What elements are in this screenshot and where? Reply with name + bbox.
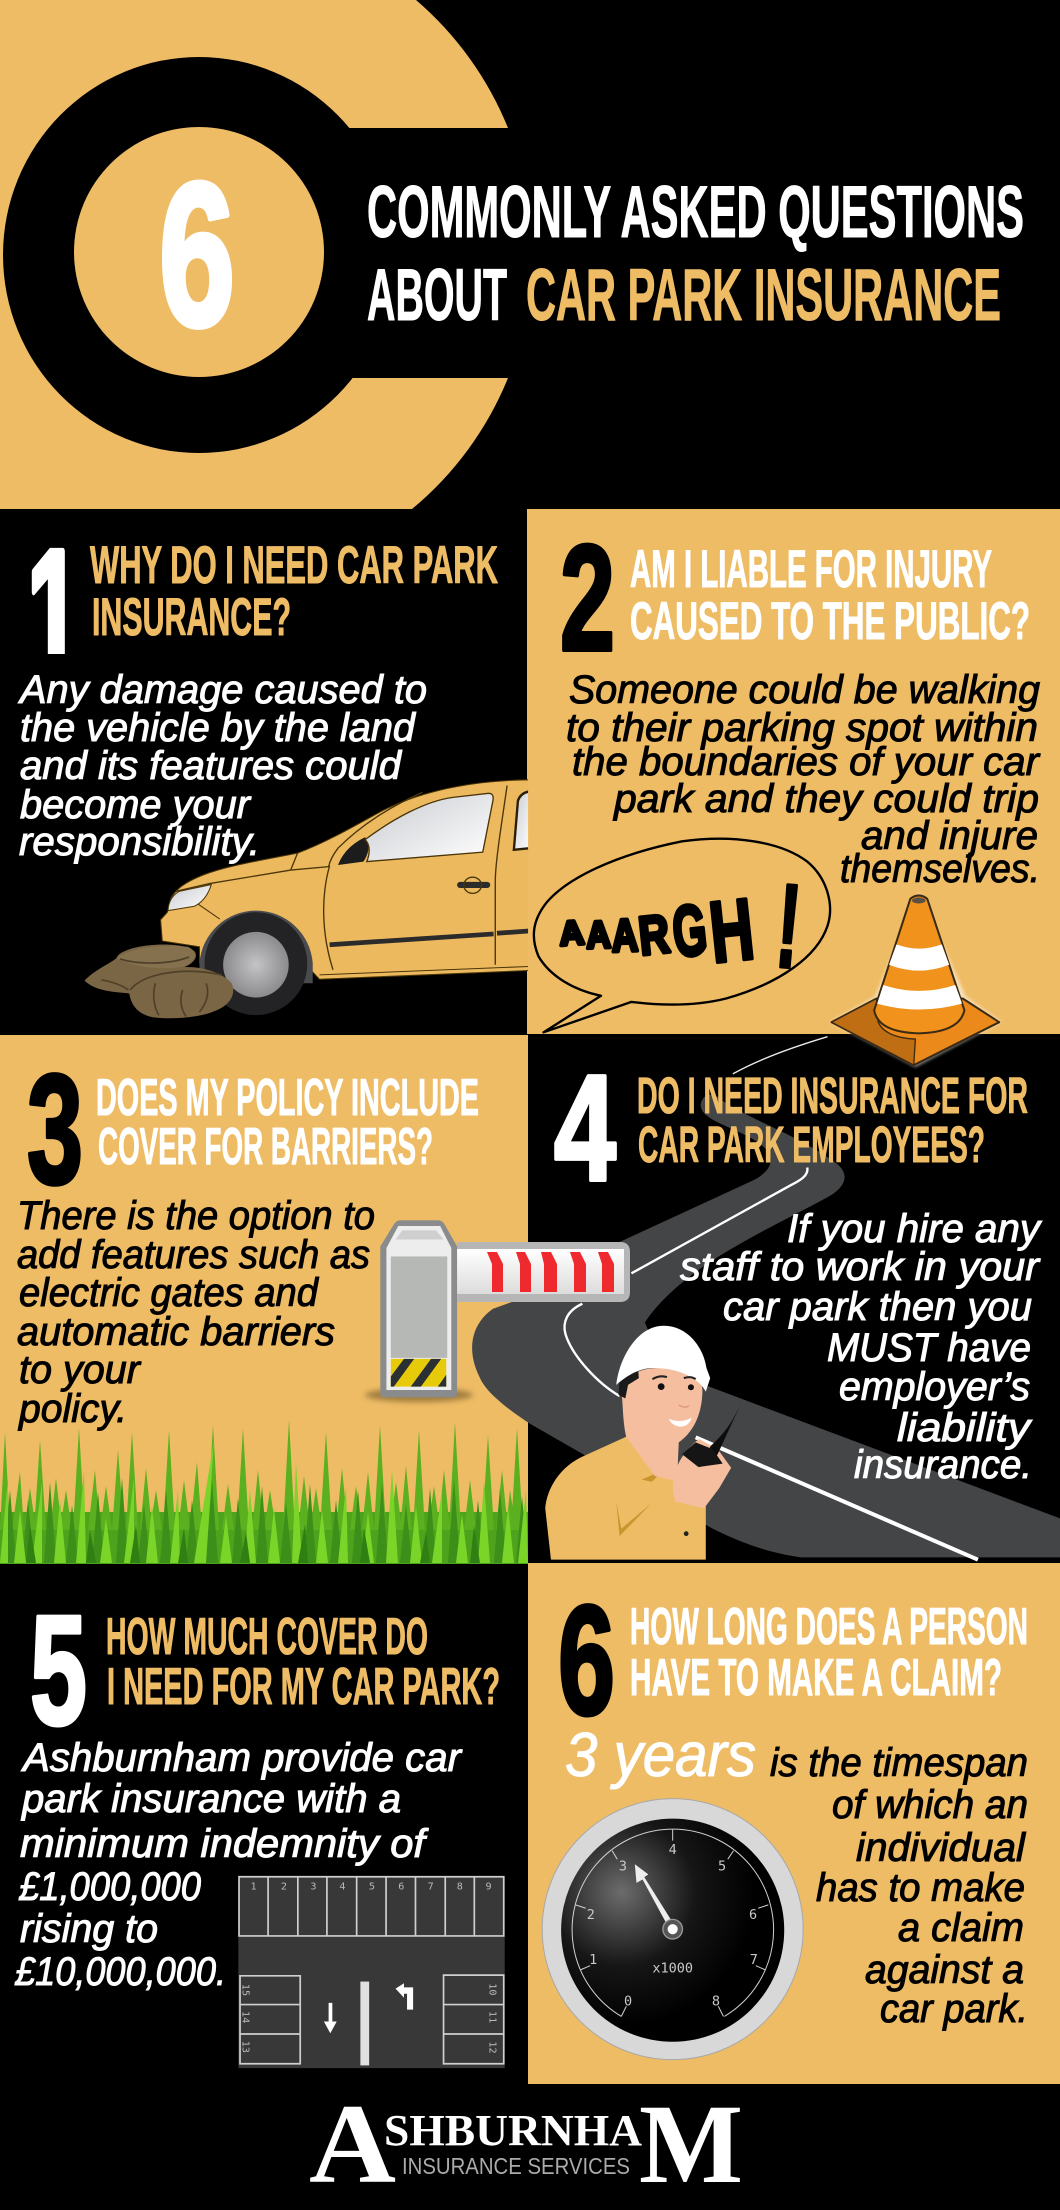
bay numbers: 1 (250, 1882, 257, 1893)
body text 6: individual (856, 1826, 1026, 1870)
barrier arm (457, 1242, 630, 1302)
body text 1 (18, 668, 427, 864)
illustration: car and rocks (85, 780, 531, 1018)
body text 2: park and they could trip (613, 777, 1039, 821)
bay numbers: 3 (310, 1882, 316, 1893)
gauge numbers: 3 (619, 1858, 627, 1874)
centre line (360, 1982, 369, 2065)
body text 2: Someone could be walking (569, 668, 1040, 712)
number 5: 5 (30, 1584, 87, 1758)
number 2: 2 (560, 513, 615, 682)
body text 6 (565, 1721, 1028, 2031)
icon: large C emblem (0, 0, 511, 509)
body text 4: insurance. (854, 1443, 1032, 1487)
windscreen strip (176, 792, 423, 891)
body text 4: staff to work in your (680, 1245, 1041, 1289)
header number 6: 6 (159, 141, 235, 369)
gauge numbers: x1000 (652, 1960, 693, 1976)
speech text AAARGH!: A (611, 910, 639, 962)
speech text AAARGH!: R (636, 904, 672, 967)
body text 3: automatic barriers (17, 1310, 335, 1354)
speech text AAARGH!: H (705, 881, 758, 981)
heading 1: INSURANCE? (92, 588, 291, 647)
body text 6: has to make (816, 1866, 1025, 1910)
gauge numbers (587, 1842, 758, 2010)
body text 1: responsibility. (19, 820, 260, 864)
heading 3: COVER FOR BARRIERS? (98, 1118, 433, 1176)
gauge needle (635, 1864, 675, 1931)
footer logo: A (309, 2082, 396, 2207)
heading 5: I NEED FOR MY CAR PARK? (107, 1658, 500, 1716)
body text 2 (566, 668, 1041, 891)
bay numbers: 4 (339, 1882, 346, 1893)
shirt (545, 1437, 706, 1560)
illustration: traffic cone (830, 892, 1002, 1067)
illustration: barrier (365, 1220, 630, 1402)
body text 4: employer’s (839, 1365, 1030, 1409)
gauge numbers: 4 (669, 1842, 677, 1858)
body text 4: car park then you (723, 1285, 1032, 1329)
body text 6: against a (865, 1948, 1024, 1992)
speech text AAARGH!: A (586, 914, 611, 957)
body text 5: rising to (20, 1907, 158, 1951)
bay numbers: 11 (487, 2011, 498, 2023)
bay numbers: 7 (428, 1882, 434, 1893)
panel 6: how long to claim (542, 1574, 1028, 2060)
gauge numbers: 2 (587, 1907, 595, 1923)
heading 3 (96, 1069, 479, 1176)
gauge numbers: 5 (718, 1858, 726, 1874)
wheel arch and wheel (199, 911, 313, 983)
number 4: 4 (554, 1043, 616, 1212)
body text 5: £1,000,000 (18, 1865, 201, 1909)
speech text AAARGH!: ! (772, 860, 805, 994)
panel 1: why car park insurance (15, 511, 531, 1018)
bay numbers: 6 (398, 1882, 404, 1893)
rocks (85, 945, 233, 1018)
bay numbers: 15 (240, 1984, 251, 1996)
number 6: 6 (558, 1574, 615, 1748)
number 1 (15, 511, 85, 717)
body text 5: minimum indemnity of (20, 1822, 429, 1866)
body text 4 (680, 1207, 1042, 1487)
bay numbers: 2 (281, 1882, 287, 1893)
car body (161, 780, 531, 979)
heading 2 (630, 540, 1030, 651)
number 3: 3 (27, 1043, 83, 1217)
bay numbers: 5 (369, 1882, 375, 1893)
icon: gauge (542, 1799, 803, 2060)
body text 4: liability (897, 1406, 1033, 1450)
road markings (733, 1037, 828, 1074)
heading 1: WHY DO I NEED CAR PARK (90, 536, 498, 595)
body text 3: to your (19, 1348, 142, 1392)
hair (619, 1370, 639, 1398)
title: ABOUT (367, 255, 507, 336)
radio (698, 1403, 741, 1467)
cone body (874, 895, 964, 1033)
rub strip (330, 931, 531, 945)
heading 6 (630, 1598, 1028, 1707)
bay numbers (240, 1882, 498, 2054)
panel 3: barriers (0, 1043, 528, 1564)
hand (673, 1439, 731, 1508)
heading 5 (106, 1608, 500, 1716)
heading 4 (637, 1067, 1028, 1173)
gauge numbers: 1 (589, 1952, 597, 1968)
illustration: road (472, 1037, 1060, 1560)
title (367, 172, 1024, 336)
heading 1 (90, 536, 498, 647)
bay numbers: 9 (485, 1882, 492, 1893)
gauge numbers: 0 (624, 1994, 632, 2010)
body text 5 (14, 1736, 463, 1994)
body text 1: the vehicle by the land (20, 706, 417, 750)
number 1: 1 (27, 511, 81, 717)
body text 3 (17, 1194, 375, 1431)
cone base (832, 999, 999, 1065)
footer logo: M (639, 2082, 743, 2207)
bay numbers: 13 (240, 2041, 251, 2053)
headlight (168, 885, 211, 911)
speech text AAARGH! (558, 860, 805, 994)
door lines (324, 786, 507, 970)
body text 3: electric gates and (19, 1271, 320, 1315)
illustration: car park plan (238, 1876, 505, 2068)
panel backgrounds (0, 509, 1060, 2084)
door handle (457, 882, 490, 888)
body text 1: become your (20, 783, 252, 827)
body text 4: MUST have (827, 1326, 1031, 1370)
heading 3: DOES MY POLICY INCLUDE (96, 1069, 479, 1127)
body text 1: Any damage caused to (18, 668, 427, 712)
bay numbers: 8 (457, 1882, 463, 1893)
body text 5: Ashburnham provide car (21, 1736, 463, 1780)
body text 3: There is the option to (17, 1194, 375, 1238)
body text 2: and injure (861, 814, 1038, 858)
illustration: worker with radio (545, 1326, 741, 1560)
body text 2: the boundaries of your car (572, 740, 1041, 784)
bay numbers: 12 (487, 2041, 498, 2054)
panel 5: how much cover (14, 1584, 505, 2068)
body text 6: is the timespan (770, 1741, 1028, 1785)
body text 3: policy. (18, 1387, 127, 1431)
body text 6: car park. (880, 1987, 1028, 2031)
bay numbers: 10 (487, 1983, 498, 1995)
body text 2: to their parking spot within (566, 706, 1038, 750)
footer logo: SHBURNHA (384, 2106, 642, 2155)
body text 6: a claim (898, 1906, 1024, 1950)
bay numbers: 14 (240, 2011, 251, 2023)
illustration: grass (0, 1420, 528, 1564)
body text 5: park insurance with a (21, 1777, 401, 1821)
body text 5: £10,000,000. (14, 1950, 226, 1994)
footer logo (309, 2082, 743, 2207)
barrier post (380, 1220, 457, 1397)
header panel (0, 0, 1024, 509)
speech bubble (534, 839, 830, 1032)
body text 6: 3 years (565, 1721, 756, 1790)
body text 2: themselves. (840, 847, 1040, 891)
body text 4: If you hire any (787, 1207, 1042, 1251)
direction arrows (324, 2003, 337, 2033)
body text 1: and its features could (20, 744, 403, 788)
face and neck (622, 1368, 702, 1481)
body text 6: of which an (832, 1783, 1028, 1827)
gauge numbers: 6 (749, 1907, 757, 1923)
body text 3: add features such as (17, 1233, 370, 1277)
barrier shadow (365, 1388, 473, 1402)
speech text AAARGH!: A (558, 914, 585, 953)
helmet (616, 1326, 710, 1392)
heading 5: HOW MUCH COVER DO (106, 1608, 428, 1666)
eyes brows mouth (652, 1376, 696, 1379)
footer logo: INSURANCE SERVICES (402, 2153, 630, 2179)
panel 4: employees (472, 1037, 1060, 1560)
speech text AAARGH!: G (669, 890, 711, 973)
gauge numbers: 8 (712, 1994, 720, 2010)
panel 2: liable for injury (534, 513, 1041, 1032)
gauge numbers: 7 (750, 1952, 758, 1968)
